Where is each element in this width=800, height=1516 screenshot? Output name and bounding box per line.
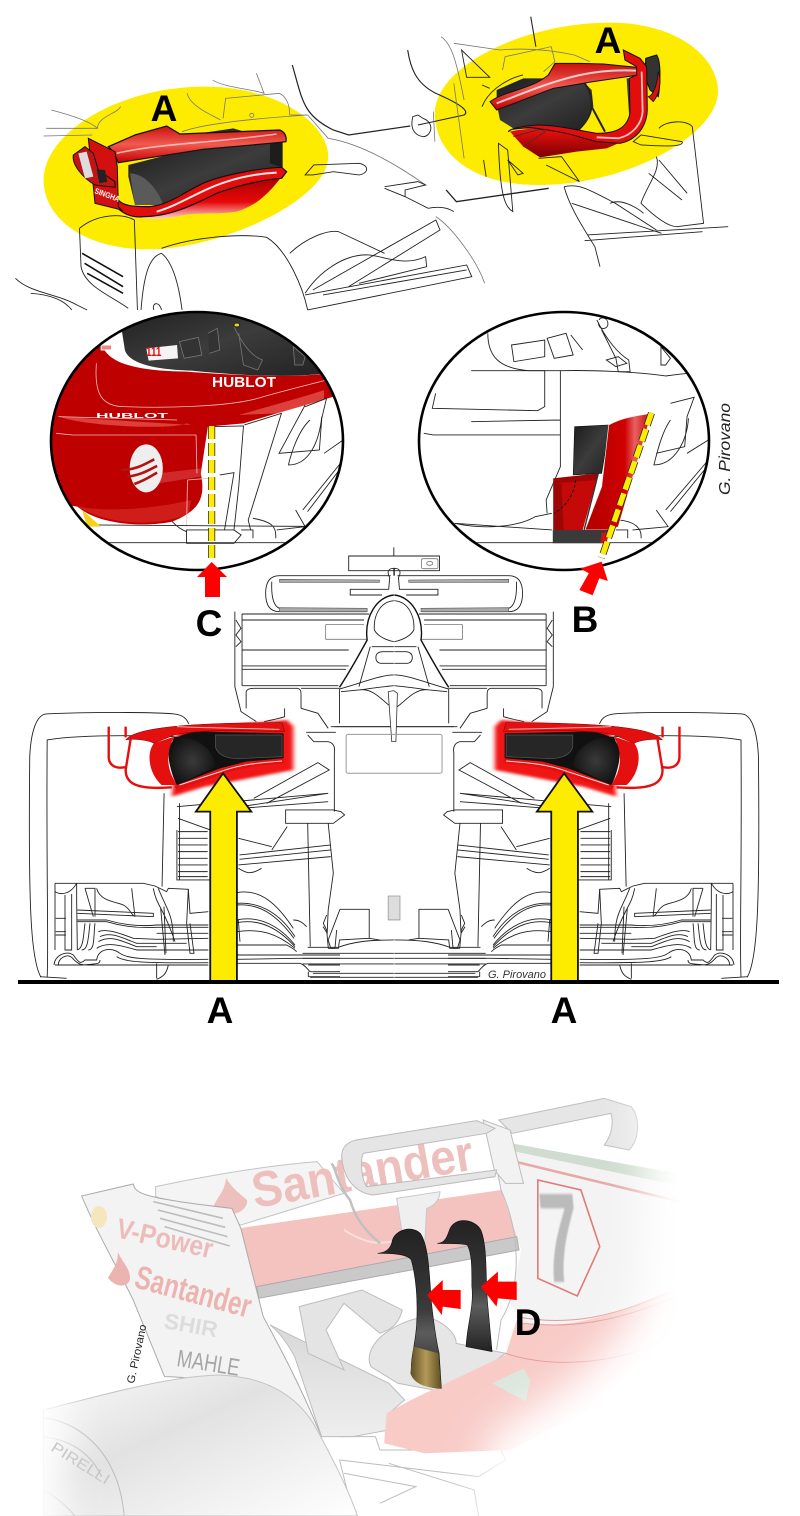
top side-view line art and yellow highlights xyxy=(15,17,728,310)
front wing right xyxy=(448,883,748,979)
floor xyxy=(270,1325,405,1437)
body lines xyxy=(506,1352,623,1363)
sponsor MAHLE: MAHLE xyxy=(175,1345,242,1382)
yellow highlight ellipse left xyxy=(44,87,328,249)
rear bodywork base xyxy=(156,1139,685,1453)
endplate xyxy=(88,138,122,210)
right half line art xyxy=(334,568,759,977)
right loop xyxy=(499,1098,638,1150)
pink sidepod and nose xyxy=(384,1287,680,1453)
flame logo xyxy=(121,459,157,484)
black interior xyxy=(128,142,283,205)
harness and belts xyxy=(179,327,305,370)
left half line art xyxy=(29,568,454,977)
suspension lines xyxy=(340,1437,506,1516)
stem xyxy=(397,1192,440,1240)
red arrow fin one xyxy=(427,1280,461,1315)
rear crash structure and hoop xyxy=(299,1290,402,1370)
flame icon wing xyxy=(108,1252,130,1286)
rear wing endplate xyxy=(82,1184,322,1437)
bracket and lower lip xyxy=(508,50,647,143)
credit rear view: G. Pirovano xyxy=(125,1323,149,1385)
letter A right: A xyxy=(595,20,621,61)
sponsor faded upper: SHIR xyxy=(162,1308,220,1342)
credit right circle: G. Pirovano xyxy=(717,403,734,495)
sponsor text SINGHA: SINGHA xyxy=(93,186,121,204)
body highlights xyxy=(58,390,324,427)
red turning vane upper xyxy=(585,413,651,530)
red bodywork xyxy=(52,346,333,524)
black interior xyxy=(497,78,593,130)
cockpit black area xyxy=(122,313,320,376)
number plate xyxy=(538,1180,600,1296)
credit front view: G. Pirovano xyxy=(488,969,546,981)
rear three-quarter car faded xyxy=(43,1098,685,1516)
wheel arcs xyxy=(43,1418,124,1516)
lower lip xyxy=(115,167,287,217)
grey crash beam xyxy=(257,1237,519,1298)
ground line xyxy=(18,980,779,984)
upper loop and stem xyxy=(332,1121,497,1243)
pink nose overlay xyxy=(384,1355,518,1454)
top bar xyxy=(108,126,286,163)
HUBLOT large: HUBLOT xyxy=(212,374,276,391)
line art right circle xyxy=(488,333,711,376)
letter A bottom right: A xyxy=(551,990,577,1031)
shell icon xyxy=(91,1206,107,1228)
sponsor V-Power: V-Power xyxy=(114,1213,216,1264)
black fin two xyxy=(437,1221,492,1352)
rear tyre xyxy=(43,1375,357,1516)
pink rear panel xyxy=(239,1190,517,1290)
sponsor logo oval xyxy=(130,444,163,492)
detail circle left xyxy=(52,313,342,544)
yellow dashed line C xyxy=(208,426,215,558)
crash beam, loops and struts xyxy=(43,1098,658,1516)
small flag xyxy=(101,345,112,350)
sponsor Santander wing: Santander xyxy=(131,1258,256,1325)
left mirror fairing xyxy=(73,126,287,219)
endplate louvres xyxy=(153,1202,230,1246)
front wing line art xyxy=(40,883,748,979)
white barge board lines xyxy=(108,412,286,544)
lower red body xyxy=(127,177,282,219)
vertical support xyxy=(496,1174,517,1350)
lower red body xyxy=(510,129,620,157)
detail circle right xyxy=(424,318,711,543)
gearbox xyxy=(369,1317,506,1390)
red arrow C xyxy=(197,562,227,597)
panel lines xyxy=(56,363,327,527)
door mirror xyxy=(645,55,660,97)
red arrow B xyxy=(579,562,608,595)
gold fin tip xyxy=(410,1347,441,1388)
HUBLOT small: HUBLOT xyxy=(96,413,170,420)
label on cockpit: 111 xyxy=(146,345,162,359)
yellow highlight ellipse right xyxy=(435,23,718,185)
black fin one xyxy=(378,1229,441,1388)
flame icon top xyxy=(213,1178,247,1214)
right red mirror xyxy=(495,720,679,797)
circle outline right xyxy=(419,312,709,570)
red arrow fin two xyxy=(481,1272,517,1307)
white sidepod panel xyxy=(488,1143,685,1325)
yellow dashed line B xyxy=(602,413,652,558)
centre details xyxy=(346,547,442,920)
letter A left: A xyxy=(151,88,177,129)
letter C: C xyxy=(196,603,222,644)
sponsor Santander top: Santander xyxy=(247,1125,478,1219)
thin car outlines xyxy=(15,17,728,310)
strut xyxy=(332,1163,380,1243)
front view car xyxy=(29,547,759,982)
circle outline left xyxy=(51,312,343,570)
badge xyxy=(73,147,115,187)
red vane lower xyxy=(553,473,598,530)
letter A bottom left: A xyxy=(207,990,233,1031)
yellow arrow right xyxy=(537,773,592,982)
yellow arrow left xyxy=(196,773,251,982)
top bar xyxy=(490,63,638,110)
left red mirror xyxy=(109,720,293,797)
dark panel xyxy=(573,425,610,475)
black fins and arrows xyxy=(378,1221,517,1388)
right mirror fairing xyxy=(490,50,660,157)
front wing left xyxy=(40,883,340,979)
car number 7: 7 xyxy=(534,1166,586,1309)
black base xyxy=(553,530,611,543)
main loop xyxy=(342,1121,497,1195)
alfa badge xyxy=(492,1368,530,1402)
letter D: D xyxy=(515,1302,541,1343)
sponsor PIRELLI: PIRELLI xyxy=(48,1439,113,1488)
rear wing top surface xyxy=(156,1162,344,1225)
letter B: B xyxy=(572,599,598,640)
